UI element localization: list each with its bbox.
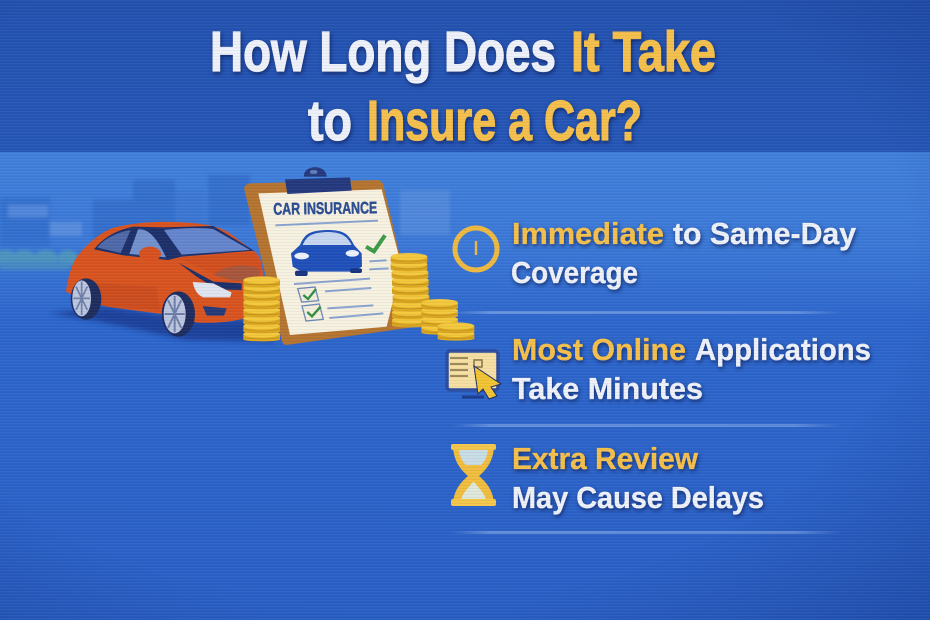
icon: yellow clock circle [455, 228, 497, 270]
text lines [294, 260, 389, 318]
icon: green check [366, 235, 385, 251]
rear side window [97, 230, 131, 253]
checkbox one [298, 287, 319, 302]
front side window [129, 229, 166, 257]
item 3 text: May Cause Delays [512, 480, 764, 515]
heading rule [275, 221, 378, 225]
item 2 text: Most Online [512, 332, 686, 367]
title: How Long Does [210, 20, 556, 84]
single coin stack [438, 322, 474, 341]
icon: monitor with cursor [447, 351, 501, 399]
illustration: clipboard [244, 167, 417, 345]
icon: blue car [291, 230, 362, 276]
car lower shade [83, 283, 160, 310]
clipboard heading: CAR INSURANCE [273, 198, 377, 219]
window surround [94, 226, 254, 260]
short coin stack [421, 299, 458, 335]
item 1 text [511, 216, 857, 290]
title: to [308, 89, 352, 153]
item 2 text: Applications [695, 332, 871, 367]
clip [285, 167, 352, 194]
item 1 text: to Same-Day [673, 216, 857, 251]
hood dent [213, 265, 259, 282]
title: It Take [571, 20, 716, 84]
car hood [178, 252, 262, 287]
board [244, 180, 417, 345]
windshield [164, 228, 250, 255]
item 1 text: Immediate [512, 216, 664, 251]
item 3 text: Extra Review [512, 441, 699, 476]
left coin stack [243, 276, 280, 341]
item 2 text [512, 332, 871, 406]
item 1 text: Coverage [511, 255, 638, 290]
illustration: coin stacks [243, 253, 474, 341]
item 3 text [512, 441, 764, 515]
skyline backdrop [0, 175, 450, 270]
illustration: damaged orange car [50, 222, 273, 342]
front wheel [162, 291, 195, 337]
title [210, 20, 716, 153]
rear wheel [71, 278, 101, 320]
checkbox two [302, 304, 323, 321]
icon: hourglass [451, 444, 496, 506]
grille [203, 306, 227, 316]
title: Insure a Car? [367, 89, 642, 153]
headlight [193, 282, 232, 297]
paper [258, 189, 402, 335]
tall coin stack [391, 253, 429, 327]
car shadow [50, 307, 273, 342]
item 2 text: Take Minutes [512, 371, 703, 406]
car body [66, 222, 263, 323]
crumple gap [178, 263, 242, 290]
mirror [139, 247, 161, 261]
